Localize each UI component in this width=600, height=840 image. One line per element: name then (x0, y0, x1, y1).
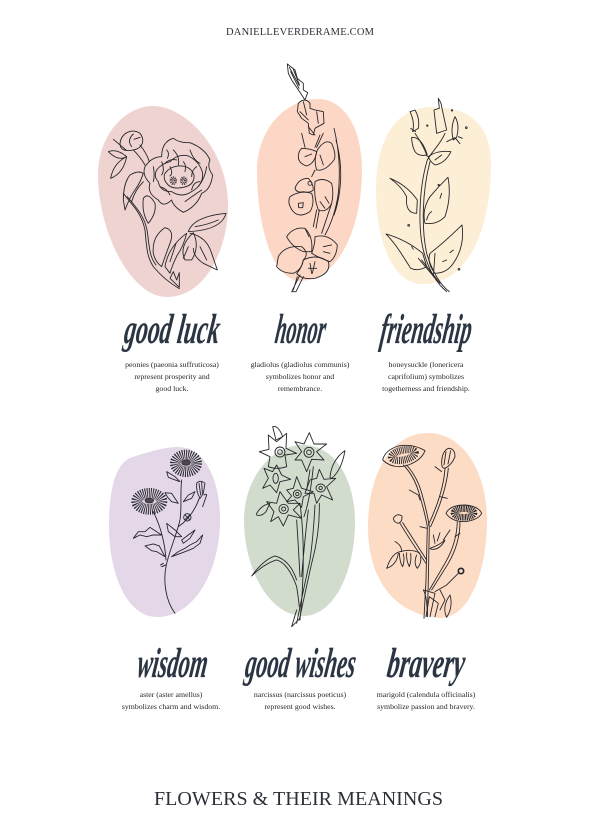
panel: peony good luck (98, 106, 228, 393)
panel: gladiolus honor (251, 64, 362, 393)
blob: peach (257, 99, 362, 281)
description: narcissus: represent good wishes. (264, 702, 336, 711)
blob: lilac (109, 447, 220, 617)
description: peonies: good luck. (156, 384, 189, 393)
title: FLOWERS & THEIR MEANINGS (154, 788, 443, 810)
blob: cream (376, 107, 491, 284)
panel: aster wisdom (109, 447, 220, 711)
description: aster: symbolizes charm and wisdom. (122, 702, 220, 711)
description: honeysuckle: caprifolium) symbolizes (388, 372, 464, 381)
description: peonies: represent prosperity and (134, 372, 210, 381)
description: honeysuckle: togetherness and friendship. (382, 384, 470, 393)
icon: peony drawing (108, 131, 226, 289)
description: aster: aster (aster amellus) (140, 690, 203, 699)
description: honeysuckle: honeysuckle (lonericera (389, 360, 464, 369)
description: gladiolus: gladiolus (gladiolus communis) (251, 360, 350, 369)
heading: wisdom: wisdom (135, 640, 211, 687)
icon: narcissus drawing (252, 426, 345, 627)
blob: sage green (244, 445, 355, 616)
website header: DANIELLEVERDERAME.COM (226, 27, 375, 38)
icon: aster drawing (133, 455, 207, 613)
description: gladiolus: remembrance. (278, 384, 322, 393)
panel: honeysuckle friendship (376, 98, 491, 393)
heading: honor: honor (273, 306, 329, 353)
icon: honeysuckle drawing (386, 98, 467, 292)
panel: marigold bravery (368, 433, 487, 711)
description: marigold: marigold (calendula officinalis) (377, 690, 476, 699)
blob: pink (98, 106, 228, 297)
icon: gladiolus drawing (277, 64, 341, 292)
panel: narcissus good wishes (242, 426, 359, 711)
description: narcissus: narcissus (narcissus poeticus) (254, 690, 347, 699)
description: peonies: peonies (paeonia suffruticosa) (125, 360, 219, 369)
heading: good luck: good luck (121, 306, 223, 353)
description: marigold: symbolize passion and bravery. (377, 702, 475, 711)
heading: friendship: friendship (378, 306, 475, 353)
icon: marigold drawing (383, 445, 482, 618)
heading: good wishes: good wishes (242, 640, 359, 687)
description: gladiolus: symbolizes honor and (266, 372, 334, 381)
heading: bravery: bravery (385, 640, 468, 687)
blob: light orange (368, 433, 487, 618)
